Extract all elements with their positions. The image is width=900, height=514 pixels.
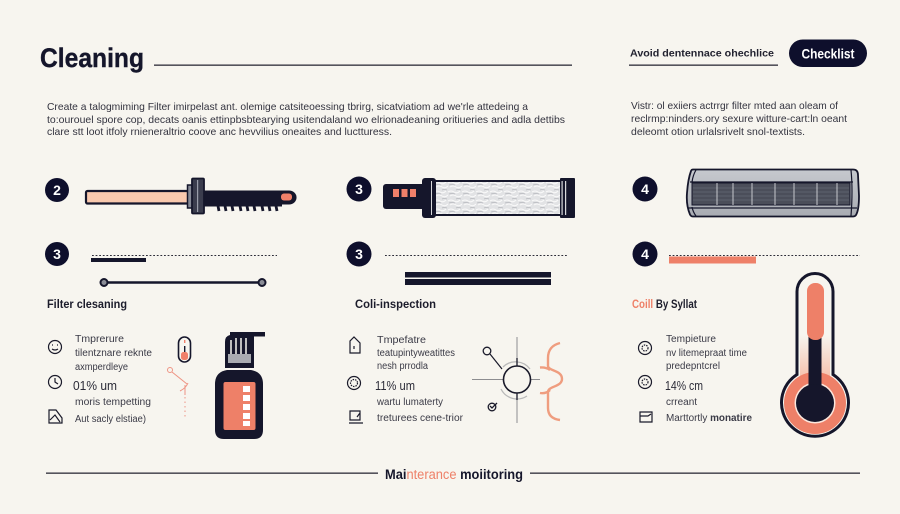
number badge 2 bbox=[45, 178, 69, 202]
dotted gauge with coral bar bbox=[669, 256, 860, 264]
number badge 3 bbox=[45, 242, 69, 266]
side text block: Vistr: ol exiiers actrrgr filter mted aan oleam of bbox=[631, 100, 838, 112]
dotted gauge with bar bbox=[91, 256, 277, 262]
text block: coil by syllat specs: Tempieture bbox=[666, 334, 716, 345]
icon: dial bbox=[638, 376, 652, 388]
icon: spray bottle bbox=[215, 332, 265, 439]
text block: coil specs: 11% um bbox=[375, 378, 415, 393]
dotted gauge bbox=[385, 254, 567, 256]
text block: filter specs: Tmprerure bbox=[75, 334, 124, 345]
number badge 4: 4 bbox=[641, 181, 649, 197]
checklist button: Checklist bbox=[802, 46, 855, 62]
number badge 3: 3 bbox=[355, 246, 363, 262]
icon: thermometer bbox=[781, 274, 848, 436]
number badge 2: 2 bbox=[53, 182, 61, 198]
icon: house tag bbox=[350, 337, 360, 353]
heading: coil inspection: Coli-inspection bbox=[355, 299, 436, 311]
text block: coil specs: treturees cene-trior bbox=[377, 413, 464, 424]
number badge 3 bbox=[346, 176, 372, 202]
icon: document bbox=[49, 410, 62, 423]
intro text block bbox=[47, 101, 565, 138]
number badge 4 bbox=[632, 176, 658, 202]
double bars bbox=[405, 272, 551, 285]
text block: filter specs: tilentznare reknte bbox=[75, 348, 152, 359]
text block: coil specs: nesh prrodla bbox=[377, 361, 428, 372]
icon: small thermometer bbox=[178, 337, 190, 362]
coil inspection diagram bbox=[472, 337, 540, 423]
number badge 3: 3 bbox=[53, 246, 61, 262]
heading: coil by syllat: Coill By Syllat bbox=[632, 299, 697, 311]
icon: gauge face bbox=[48, 340, 62, 354]
text block: filter specs: 01% um bbox=[73, 378, 117, 393]
icon: disc bbox=[348, 376, 360, 390]
icon: gear bbox=[638, 342, 652, 354]
side text block: reclrmp:ninders.ory sexure witture-cart:ln oeant bbox=[631, 113, 847, 125]
intro text block: to:ourouel spore cop, decats oanis ettinpbsbtearying usitendaland wo elrionadeaning oritiueries and adla dettibs bbox=[47, 114, 565, 126]
intro text block: Create a talogmiming Filter imirpelast ant. olemige catsiteoessing tbrirg, sicatviatiom ad we'rle attedeing a bbox=[47, 101, 528, 113]
text block: coil by syllat specs bbox=[665, 334, 752, 424]
icon: filter cartridge bbox=[383, 178, 575, 218]
intro text block: clare stt loot itfoly rnieneraltrio coove anc hevvilius oneaites and luctturess. bbox=[47, 126, 392, 138]
rod bbox=[100, 279, 266, 286]
text block: coil specs: teatupintyweatittes bbox=[377, 348, 455, 359]
side text block: deleomt otion urlalsrivelt snol-textists. bbox=[631, 126, 805, 138]
number badge 4 bbox=[632, 242, 658, 266]
number badge 4: 4 bbox=[641, 246, 649, 262]
icon: clock bbox=[48, 376, 62, 388]
side text block bbox=[631, 100, 847, 138]
text block: filter specs bbox=[73, 334, 152, 425]
icon: brush bbox=[86, 178, 297, 214]
text block: coil by syllat specs: Marttortly monatire bbox=[666, 413, 752, 424]
text block: coil specs bbox=[375, 335, 464, 424]
checklist button bbox=[789, 40, 867, 67]
footer heading: Mainterance moiitoring bbox=[385, 467, 523, 482]
text block: coil by syllat specs: 14% cm bbox=[665, 378, 703, 393]
text block: coil by syllat specs: nv litemepraat time bbox=[666, 348, 747, 359]
text block: filter specs: axmperdleye bbox=[75, 362, 128, 373]
number badge 3 bbox=[346, 242, 372, 266]
number badge 3: 3 bbox=[355, 181, 363, 197]
heading: filter cleaning: Filter clesaning bbox=[47, 299, 127, 311]
icon: small coral probe bbox=[168, 368, 188, 419]
text block: coil specs: wartu lumaterty bbox=[376, 397, 443, 408]
text block: coil by syllat specs: crreant bbox=[666, 397, 697, 408]
text block: coil by syllat specs: predepntcrel bbox=[666, 361, 720, 372]
text block: coil specs: Tmpefatre bbox=[377, 335, 426, 346]
coral bracket bbox=[540, 343, 562, 420]
checklist heading: Avoid dentennace ohechlice bbox=[630, 48, 774, 60]
icon: envelope bbox=[640, 412, 652, 422]
text block: filter specs: Aut sacly elstiae) bbox=[75, 414, 146, 425]
title: Cleaning bbox=[40, 43, 144, 73]
text block: filter specs: moris tempetting bbox=[75, 397, 151, 408]
icon: air conditioner unit bbox=[687, 170, 859, 216]
icon: laptop bbox=[349, 411, 363, 423]
